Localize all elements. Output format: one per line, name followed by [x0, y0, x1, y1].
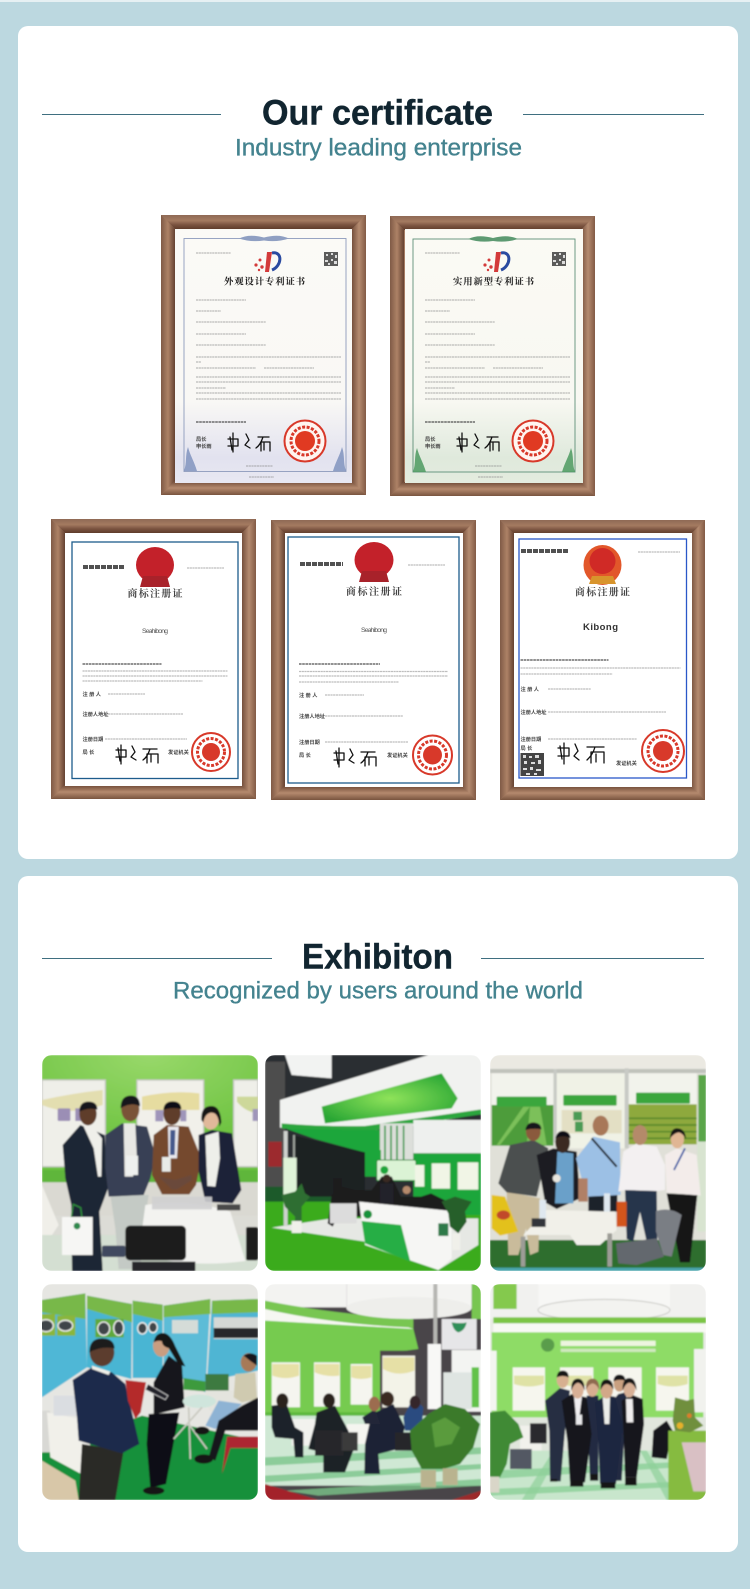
- photo: meeting at blue panels: [39, 1284, 258, 1500]
- signature: [558, 743, 604, 764]
- certificate: design patent: 申长雨: [196, 442, 212, 450]
- glass table: [183, 1395, 216, 1408]
- table: [523, 1210, 617, 1245]
- heading: exhibiton: [42, 938, 704, 1004]
- chair: [616, 1238, 664, 1265]
- heading: exhibiton: Exhibiton: [302, 938, 453, 976]
- person 1: [63, 1125, 108, 1271]
- photo: team group portrait: [490, 1284, 706, 1500]
- floor: [42, 1416, 258, 1500]
- people: [328, 1177, 451, 1227]
- chair: [125, 1226, 186, 1260]
- certificate: trademark Seahibong centre: Seahibong: [361, 627, 387, 634]
- certificate: utility model patent: 申长雨: [425, 442, 441, 450]
- person 1: [507, 1192, 540, 1255]
- certificate: trademark Seahibong left: 局 长: [82, 748, 95, 756]
- certificate: design patent: [161, 215, 366, 495]
- person 3: [588, 1195, 617, 1212]
- flowers: [673, 1397, 703, 1432]
- seated people: [272, 1404, 303, 1457]
- certificate: trademark Seahibong centre: [271, 520, 476, 800]
- patent logo: [254, 252, 280, 272]
- certificate: trademark Seahibong left: 注册日期: [82, 735, 103, 743]
- certificate: trademark Seahibong centre: 局 长: [299, 751, 312, 759]
- emblem: [584, 545, 622, 585]
- certificate: trademark Seahibong centre: 商标注册证: [346, 585, 402, 598]
- certificate: trademark Seahibong centre: 注 册 人: [299, 691, 318, 699]
- heading: our certificate: Industry leading enterprise: [235, 134, 522, 162]
- heading: our certificate: [42, 94, 704, 162]
- red chair: [125, 1380, 146, 1419]
- signature: [116, 745, 158, 764]
- certificate: trademark Kibong right: 注 册 人: [520, 685, 540, 693]
- tables: [292, 1419, 315, 1446]
- certificate: trademark Kibong right: Kibong: [583, 622, 618, 633]
- heading: our certificate: Our certificate: [262, 94, 493, 132]
- QR code: [520, 753, 544, 776]
- bag: [492, 1195, 518, 1236]
- person 2: [537, 1148, 580, 1209]
- certificate: utility model patent: [390, 216, 595, 496]
- bag: [71, 1204, 82, 1218]
- panel: certificates: [18, 26, 738, 859]
- man: [79, 1444, 124, 1500]
- certificate: design patent: 外观设计专利证书: [224, 276, 306, 288]
- certificate: trademark Seahibong centre: 注册人地址: [299, 712, 326, 720]
- certificate: utility model patent: 局长: [425, 435, 436, 443]
- certificate: trademark Kibong right: 发证机关: [616, 759, 638, 767]
- patent logo: [483, 252, 509, 272]
- certificate: trademark Seahibong left: 注 册 人: [82, 690, 102, 698]
- seal: [512, 420, 554, 462]
- certificate: trademark Seahibong centre: 发证机关: [387, 751, 409, 759]
- certificate: trademark Kibong right: 注册日期: [520, 735, 541, 743]
- plants: [282, 1183, 310, 1223]
- photo: four people at booth: [42, 1055, 258, 1271]
- signature: [334, 748, 376, 767]
- person 2: [110, 1195, 149, 1269]
- certificate: trademark Seahibong left: 注册人地址: [82, 710, 109, 718]
- shoes: [550, 1474, 637, 1488]
- certificate: utility model patent: 实用新型专利证书: [453, 276, 535, 288]
- table: [139, 1203, 245, 1264]
- seal: [642, 730, 684, 772]
- counter: [47, 1412, 92, 1474]
- plant: [410, 1404, 480, 1469]
- seal: [413, 736, 452, 774]
- signature: [457, 433, 499, 452]
- team members: [545, 1388, 570, 1481]
- woman: [147, 1412, 179, 1488]
- certificate: trademark Seahibong left: 发证机关: [168, 748, 190, 756]
- counter: [668, 1431, 706, 1500]
- seal: [192, 733, 230, 771]
- desk: [359, 1202, 452, 1270]
- seal: [284, 420, 326, 462]
- certificate: trademark Seahibong left: [51, 519, 256, 799]
- photo: green booth: [265, 1055, 481, 1271]
- QR code: [552, 252, 566, 266]
- certificate: design patent: 局长: [196, 435, 207, 443]
- photo: five people at stand: [490, 1055, 706, 1271]
- certificate: trademark Kibong right: 注册人地址: [520, 708, 547, 716]
- certificate: trademark Seahibong left: Seahibong: [142, 628, 168, 635]
- seated people: [205, 1401, 242, 1429]
- black coat: [652, 1421, 673, 1459]
- person 5: [667, 1193, 697, 1262]
- plant: [490, 1411, 523, 1477]
- photo: seated visitors in green booth: [265, 1284, 481, 1500]
- emblem: [354, 542, 394, 582]
- certificate: trademark Seahibong left: 商标注册证: [128, 587, 182, 600]
- pots: [421, 1470, 436, 1487]
- certificate: trademark Seahibong centre: 注册日期: [299, 738, 320, 746]
- certificate: trademark Kibong right: 商标注册证: [575, 586, 630, 598]
- signature: [228, 433, 270, 452]
- certificate: trademark Kibong right: [500, 520, 705, 800]
- emblem: [136, 547, 174, 587]
- certificate: trademark Kibong right: 局 长: [520, 744, 533, 752]
- person 3: [152, 1125, 201, 1194]
- person 4: [199, 1130, 241, 1203]
- panel: exhibition: [18, 876, 738, 1552]
- heading: exhibiton: Recognized by users around the world: [173, 978, 583, 1004]
- person 4: [625, 1188, 657, 1242]
- QR code: [324, 252, 338, 266]
- floor: [265, 1416, 481, 1486]
